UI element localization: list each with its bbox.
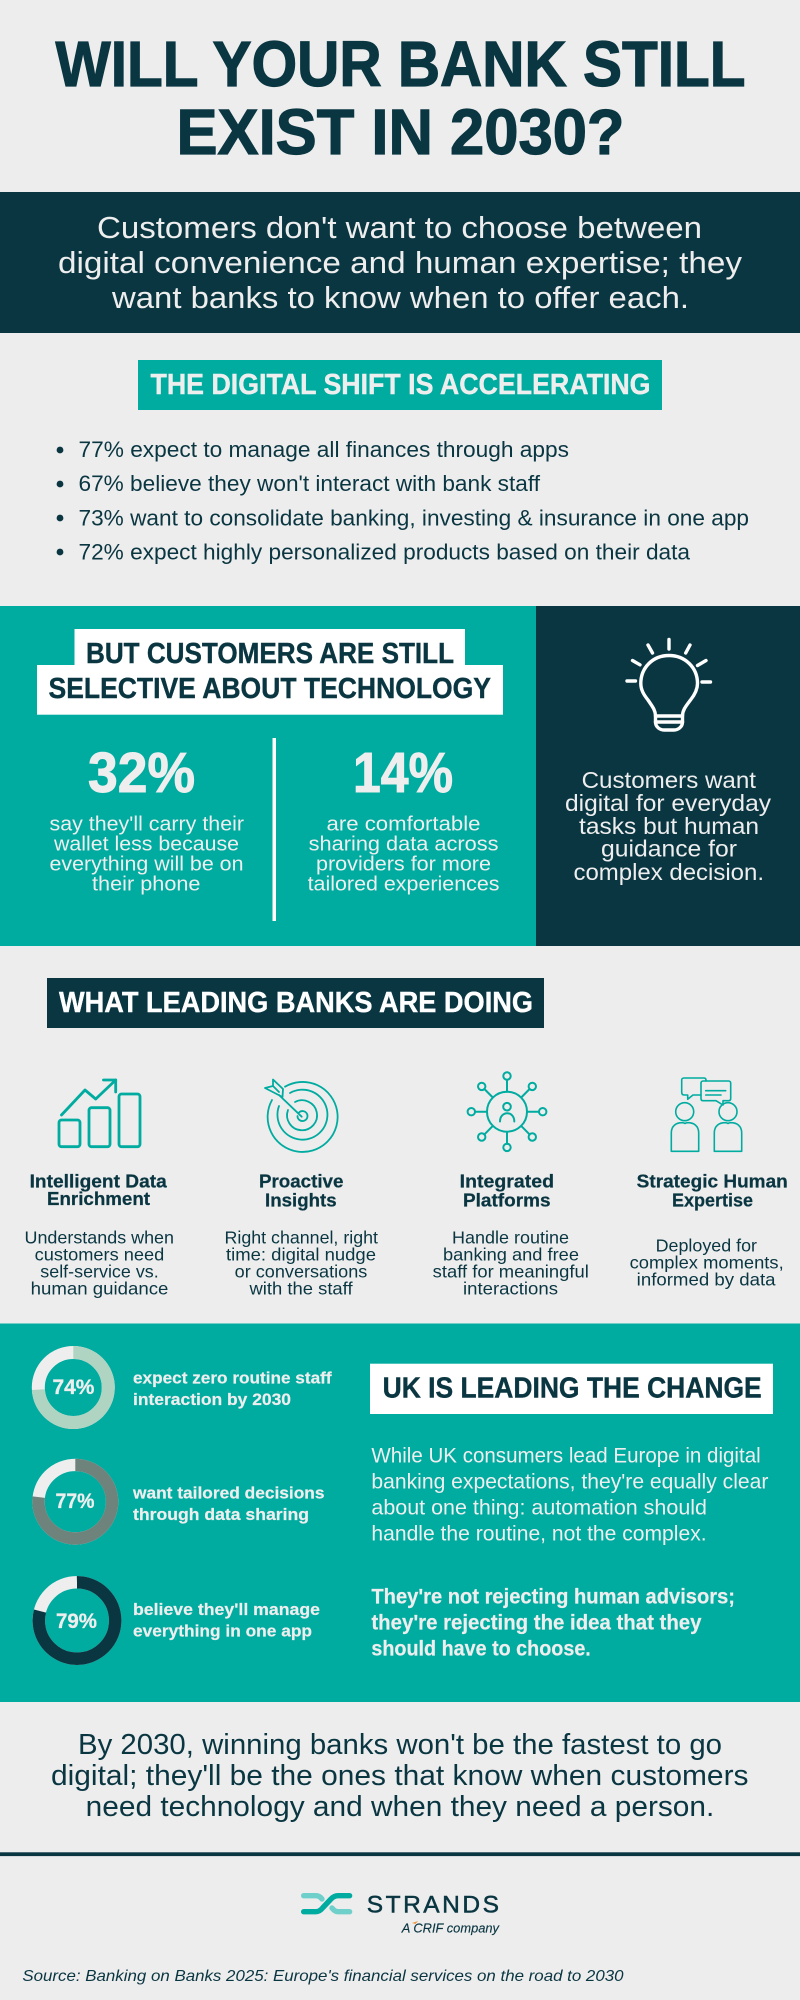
- stat: 32%: 32%: [88, 741, 195, 805]
- label: 74%: interaction by 2030: [133, 1390, 291, 1409]
- label: 74%: [133, 1368, 332, 1409]
- chart: donut 79%: 79%: [56, 1610, 97, 1633]
- stat: 32%: everything will be on: [50, 853, 244, 876]
- closing statement: [51, 1729, 748, 1823]
- heading: the digital shift: [138, 360, 662, 410]
- description: self-service vs.: [40, 1261, 159, 1281]
- description: informed by data: [637, 1270, 776, 1290]
- description: or conversations: [235, 1261, 368, 1281]
- stat: 14%: tailored experiences: [308, 873, 500, 896]
- description: [24, 1227, 174, 1298]
- text: UK emphasis: should have to choose.: [371, 1637, 591, 1660]
- stat: 32%: their phone: [92, 873, 200, 896]
- text: UK emphasis: [371, 1585, 735, 1660]
- closing statement: need technology and when they need a person.: [86, 1791, 714, 1823]
- title: EXIST IN 2030?: [176, 96, 624, 168]
- heading: Proactive: [259, 1172, 343, 1192]
- intro text: want banks to know when to offer each.: [111, 280, 689, 315]
- description: banking and free: [443, 1244, 579, 1264]
- heading: Intelligent Data: [30, 1172, 168, 1192]
- description: customers need: [35, 1244, 164, 1264]
- stat: 32%: say they'll carry their: [50, 813, 244, 836]
- label: 79%: everything in one app: [133, 1622, 312, 1641]
- heading: [460, 1172, 554, 1211]
- text: UK paragraph: about one thing: automation should: [371, 1496, 707, 1519]
- description: complex moments,: [630, 1253, 784, 1273]
- description: Understands when: [24, 1227, 174, 1247]
- icon: Strands mark: [304, 1896, 350, 1912]
- bullet list: 72% expect highly personalized products based on their data: [78, 540, 690, 564]
- description: with the staff: [248, 1278, 353, 1298]
- callout text: digital for everyday: [565, 790, 771, 816]
- heading: the digital shift: THE DIGITAL SHIFT IS ACCELERATING: [150, 369, 650, 401]
- stat: 14%: sharing data across: [309, 833, 498, 856]
- column: integrated platforms: [433, 1072, 589, 1298]
- heading: Strategic Human: [637, 1172, 788, 1192]
- text: UK paragraph: [371, 1444, 768, 1545]
- source note: Source: Banking on Banks 2025: Europe's financial services on the road to 2030: [22, 1968, 624, 1985]
- description: [630, 1236, 784, 1290]
- callout text: complex decision.: [574, 859, 764, 885]
- label: 79%: believe they'll manage: [133, 1600, 320, 1619]
- intro text: [58, 210, 743, 315]
- description: human guidance: [31, 1278, 168, 1298]
- text: UK emphasis: They're not rejecting human advisors;: [371, 1585, 735, 1608]
- label: 74%: expect zero routine staff: [133, 1368, 332, 1387]
- intro text: Customers don't want to choose between: [97, 210, 702, 245]
- chart: donut 77%: 77%: [56, 1490, 95, 1513]
- heading: but customers are still selective: SELECTIVE ABOUT TECHNOLOGY: [48, 673, 491, 705]
- column: proactive insights: [224, 1080, 378, 1298]
- label: 77%: [132, 1483, 324, 1524]
- callout text: Customers want: [582, 767, 756, 793]
- intro text: digital convenience and human expertise; they: [58, 245, 743, 280]
- description: time: digital nudge: [226, 1244, 376, 1264]
- chart: donut 77%: [38, 1465, 112, 1538]
- icon: light bulb: [627, 640, 710, 730]
- panel: intro band: [0, 192, 800, 333]
- heading: Enrichment: [47, 1189, 150, 1209]
- description: Right channel, right: [224, 1227, 378, 1247]
- stat: 14%: are comfortable: [326, 813, 480, 836]
- icon: target and arrow: [265, 1080, 338, 1152]
- text: UK paragraph: While UK consumers lead Europe in digital: [371, 1444, 761, 1467]
- stat: 14%: providers for more: [316, 853, 491, 876]
- icon: network with person: [468, 1072, 546, 1151]
- bullet list: 73% want to consolidate banking, investing & insurance in one app: [78, 506, 749, 530]
- heading: Platforms: [463, 1191, 550, 1211]
- description: [224, 1227, 378, 1298]
- heading: what leading banks are doing: [47, 978, 544, 1028]
- bullet list: 67% believe they won't interact with bank staff: [78, 471, 541, 496]
- label: 79%: [133, 1600, 320, 1641]
- logo: Strands: STRANDS: [367, 1891, 499, 1918]
- description: staff for meaningful: [433, 1261, 589, 1281]
- stat: 32%: [50, 741, 244, 896]
- callout text: [565, 767, 771, 885]
- heading: UK is leading the change: UK IS LEADING THE CHANGE: [383, 1372, 762, 1404]
- panel: UK is leading the change: [0, 1324, 800, 1702]
- heading: Integrated: [460, 1172, 554, 1192]
- heading: [259, 1172, 343, 1211]
- panel: digital and human guidance: [536, 606, 800, 946]
- logo: Strands: [304, 1891, 500, 1935]
- stat: 32%: wallet less because: [53, 833, 239, 856]
- title: WILL YOUR BANK STILL: [56, 28, 746, 100]
- column: intelligent data enrichment: [24, 1080, 174, 1298]
- description: interactions: [463, 1278, 558, 1298]
- logo: Strands: A CRIF company: [401, 1920, 500, 1935]
- text: UK emphasis: they're rejecting the idea that they: [371, 1611, 702, 1634]
- stat: 14%: 14%: [353, 741, 453, 805]
- title: [56, 28, 746, 168]
- heading: [637, 1172, 788, 1211]
- closing statement: digital; they'll be the ones that know when customers: [51, 1760, 748, 1792]
- stat: 14%: [308, 741, 500, 896]
- callout text: tasks but human: [579, 813, 759, 839]
- panel: selective about technology: [0, 606, 536, 946]
- heading: what leading banks are doing: WHAT LEADING BANKS ARE DOING: [59, 987, 533, 1019]
- heading: Expertise: [672, 1191, 753, 1211]
- icon: rising bar chart: [59, 1080, 140, 1147]
- icon: two people talking: [671, 1078, 742, 1151]
- label: 77%: through data sharing: [133, 1505, 309, 1524]
- heading: but customers are still selective: BUT CUSTOMERS ARE STILL: [86, 638, 454, 670]
- bullet list: 77% expect to manage all finances through apps: [78, 437, 569, 462]
- heading: Insights: [265, 1191, 337, 1211]
- chart: donut 79%: [39, 1582, 115, 1659]
- text: UK paragraph: handle the routine, not the complex.: [371, 1522, 707, 1545]
- heading: UK is leading the change: [370, 1364, 773, 1414]
- label: 77%: want tailored decisions: [132, 1483, 324, 1502]
- description: Deployed for: [656, 1236, 757, 1256]
- bullet list: [57, 437, 749, 564]
- column: strategic human expertise: [630, 1078, 788, 1290]
- heading: but customers are still selective: [37, 629, 503, 715]
- callout text: guidance for: [601, 836, 737, 862]
- description: [433, 1227, 589, 1298]
- description: Handle routine: [452, 1227, 569, 1247]
- chart: donut 74%: [38, 1352, 108, 1422]
- text: UK paragraph: banking expectations, they're equally clear: [371, 1470, 768, 1493]
- heading: [30, 1172, 168, 1209]
- chart: donut 74%: 74%: [52, 1376, 95, 1399]
- closing statement: By 2030, winning banks won't be the fastest to go: [78, 1729, 722, 1761]
